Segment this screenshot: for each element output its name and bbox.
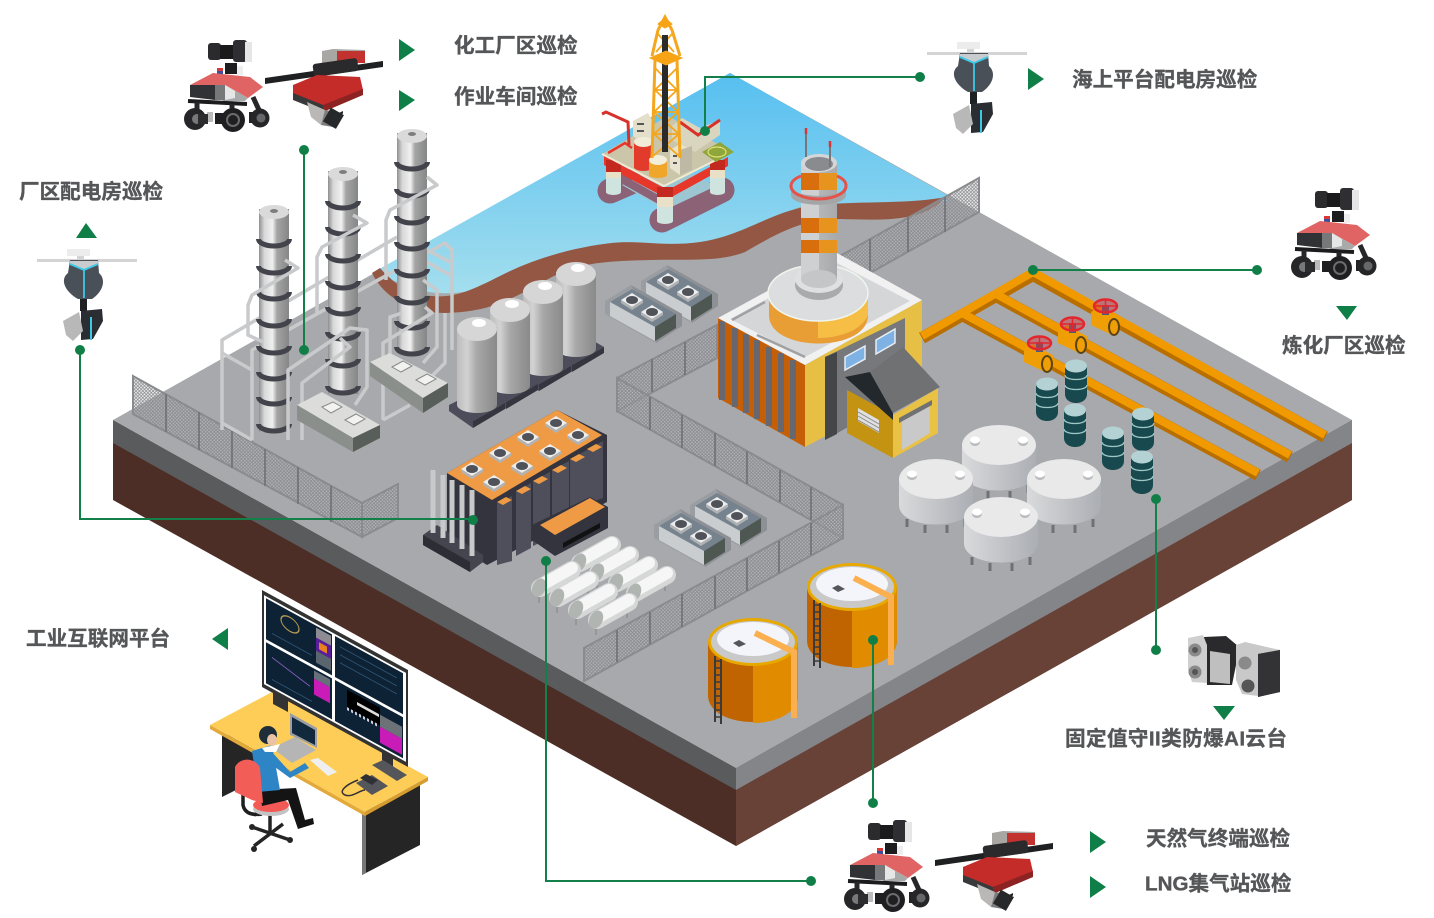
air cooling units lower <box>654 489 767 567</box>
silver storage tanks <box>449 262 604 428</box>
label: refinery inspection: 炼化厂区巡检 <box>1282 334 1406 358</box>
light pipework front <box>248 177 445 440</box>
label: chemical plant inspection: 化工厂区巡检 <box>454 34 578 58</box>
telephone <box>342 774 388 796</box>
circular base <box>769 293 868 344</box>
desk legs <box>222 735 260 797</box>
windows <box>845 329 895 370</box>
label: fixed explosion-proof AI gimbal: 固定值守II类防爆AI云台 <box>1065 726 1287 750</box>
concrete base right <box>370 353 448 413</box>
icon: rail robot bottom <box>935 831 1053 911</box>
sea water <box>372 73 947 293</box>
annex <box>532 497 608 556</box>
icon: rail robot top left <box>265 49 383 129</box>
operator workstation <box>210 590 428 875</box>
air cooling units upper <box>605 265 718 343</box>
operator <box>235 726 314 852</box>
label: industrial internet platform: 工业互联网平台 <box>26 626 170 650</box>
label: LNG station inspection: LNG集气站巡检 <box>1145 872 1292 896</box>
crane <box>602 112 629 145</box>
light pipework rear <box>222 237 452 440</box>
platform base <box>113 73 1352 846</box>
icon: hanging robot left <box>37 249 137 341</box>
laptop <box>272 713 317 763</box>
label: plant power room inspection: 厂区配电房巡检 <box>19 180 164 204</box>
oil drums <box>1036 360 1154 494</box>
desk top <box>210 692 428 816</box>
main plant building <box>718 128 940 458</box>
video wall monitor <box>262 590 408 767</box>
exhaust pipes <box>423 525 483 572</box>
stack 3 <box>396 129 428 354</box>
concrete base left <box>297 392 380 452</box>
orange pipelines <box>922 272 1325 475</box>
chimney <box>801 163 837 279</box>
derrick <box>650 17 682 158</box>
garage annex <box>845 347 940 458</box>
label: natural gas terminal inspection: 天然气终端巡检 <box>1146 826 1291 850</box>
icon: fixed explosion-proof camera <box>1188 635 1280 697</box>
stack 1 <box>258 205 290 432</box>
stack 2 <box>328 167 358 394</box>
icon: wheeled robot right <box>1291 188 1376 280</box>
coastline band <box>372 197 947 313</box>
green callout dots <box>75 72 1262 886</box>
compressor building <box>423 410 608 572</box>
white flat-top tanks <box>899 425 1101 571</box>
green callout lines <box>80 77 1257 881</box>
fence: left boundary <box>133 376 398 537</box>
icon: hanging robot top right <box>927 42 1027 134</box>
white horizontal tanks <box>529 543 667 635</box>
fence: back right <box>840 178 979 290</box>
pipeline valves <box>1024 300 1121 372</box>
label: offshore platform power room inspection: 海上平台配电房巡检 <box>1072 68 1258 92</box>
orange tank left <box>708 618 798 724</box>
icon: wheeled robot bottom <box>844 820 930 912</box>
helipad <box>702 142 734 162</box>
keyboard <box>310 758 337 776</box>
label: workshop inspection: 作业车间巡检 <box>454 84 578 108</box>
monitor stands <box>273 690 407 781</box>
fence: central enclosure <box>584 325 843 681</box>
orange tank right <box>807 563 897 668</box>
modules <box>633 113 720 175</box>
offshore drilling platform <box>602 17 734 224</box>
icon: wheeled robot top left <box>184 40 270 132</box>
